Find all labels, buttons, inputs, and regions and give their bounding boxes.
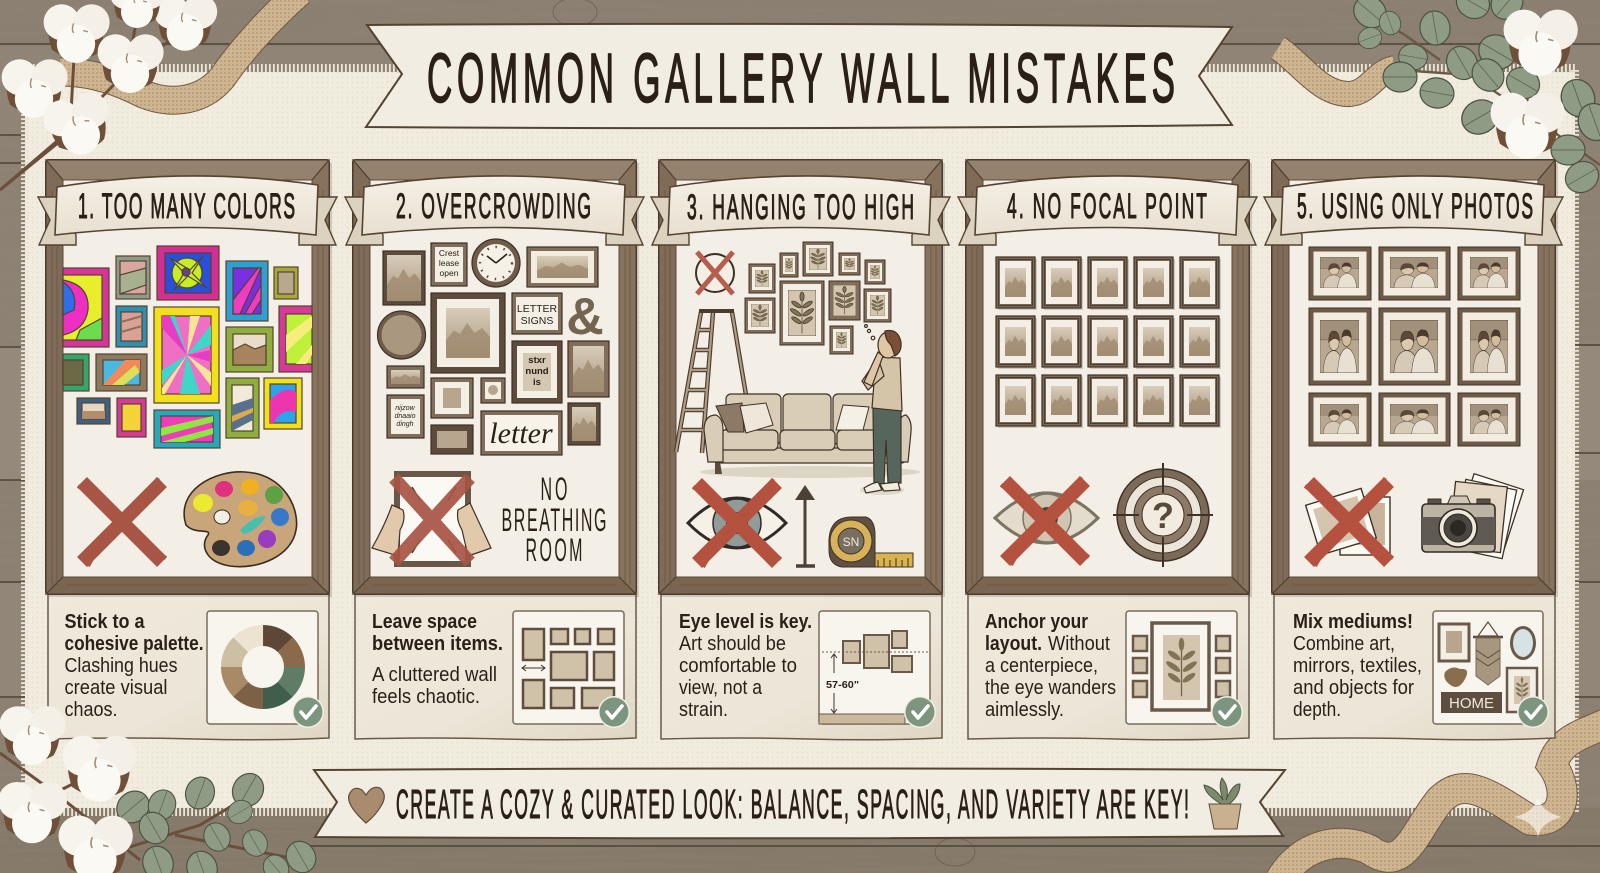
panel 2 crowded sepia frames bbox=[378, 239, 609, 455]
panel 3 high frames cluster bbox=[745, 242, 891, 354]
botanicals: top right eucalyptus and cotton bbox=[1347, 0, 1600, 198]
panel 5 crossed loose photos bbox=[1305, 478, 1393, 566]
panel 4 caption card: the eye wanders bbox=[985, 677, 1116, 699]
panel 5: using only photos bbox=[1264, 160, 1563, 740]
panel 5 mixed media thumbnail bbox=[1433, 611, 1549, 728]
panel 3 eye-level thumbnail bbox=[819, 611, 936, 728]
panel 1 caption card: chaos. bbox=[64, 699, 118, 721]
botanicals: top left cotton bbox=[0, 0, 217, 190]
panel 3 caption card: strain. bbox=[679, 699, 728, 721]
panel 4 wooden frame bbox=[966, 160, 1252, 597]
panel 2 heading ribbon: 2. OVERCROWDING bbox=[396, 186, 591, 226]
panel 4 heading ribbon bbox=[958, 176, 1257, 245]
panel 1 caption card: Stick to a bbox=[64, 611, 145, 633]
panel 1 color wheel thumbnail bbox=[207, 611, 324, 728]
panel 4 uniform frame grid bbox=[996, 257, 1221, 428]
panel 2 crowded sepia frames: SIGNS bbox=[521, 315, 553, 327]
title banner bbox=[366, 24, 1232, 128]
panel 5 caption card: mirrors, textiles, bbox=[1293, 655, 1422, 677]
panel 2 crowded sepia frames: is bbox=[533, 377, 541, 388]
panel 5 wooden frame bbox=[1272, 160, 1558, 597]
panel 4 caption card: layout. bbox=[985, 633, 1042, 655]
panel 2 no breathing room text bbox=[502, 472, 606, 569]
ribbon: bottom right bbox=[1280, 722, 1600, 873]
panel 2 caption card: feels chaotic. bbox=[372, 686, 480, 708]
panel 4 caption card: aimlessly. bbox=[985, 699, 1064, 721]
panel 4 caption card: Anchor your bbox=[985, 611, 1088, 633]
botanicals: bottom left cotton and eucalyptus bbox=[0, 706, 321, 873]
panel 4 target with question mark bbox=[1113, 463, 1213, 567]
panel 4: no focal point bbox=[958, 160, 1257, 740]
panel 3 crossed eye bbox=[688, 479, 786, 567]
panel 3 man looking up bbox=[860, 325, 904, 495]
panel 2 crowded sepia frames: letter bbox=[489, 417, 553, 450]
panel 2 crowded sepia frames: stxr bbox=[528, 355, 546, 366]
panel 1 heading ribbon bbox=[38, 176, 337, 245]
panel 1 red X bbox=[78, 478, 166, 566]
panel 2 crowded sepia frames: nund bbox=[525, 366, 549, 377]
panel 3 wooden frame bbox=[659, 160, 945, 597]
panel 5 heading ribbon bbox=[1264, 176, 1563, 245]
sparkle mark bbox=[1514, 797, 1562, 837]
panel 2 spaced layout thumbnail bbox=[513, 611, 630, 728]
panel 2 crowded sepia frames: nijzow bbox=[395, 405, 416, 412]
panel 2 crowded sepia frames: open bbox=[440, 268, 459, 278]
panel 2 caption card: A cluttered wall bbox=[372, 664, 497, 686]
panel 3 heading ribbon: 3. HANGING TOO HIGH bbox=[687, 187, 914, 227]
panel 2 crowded sepia frames: dnaaio bbox=[394, 413, 416, 420]
footer banner bbox=[314, 768, 1285, 838]
panel 4 anchored layout thumbnail bbox=[1126, 611, 1243, 728]
panel 1 heading ribbon: 1. TOO MANY COLORS bbox=[78, 186, 295, 226]
panel 2 wooden frame bbox=[353, 160, 639, 597]
panel 4 heading ribbon: 4. NO FOCAL POINT bbox=[1007, 186, 1207, 226]
panel 3 caption card: comfortable to bbox=[679, 655, 797, 677]
panel 4 target with question mark: ? bbox=[1152, 495, 1174, 536]
panel 2 caption card bbox=[355, 594, 636, 740]
panel 3 caption card bbox=[661, 594, 942, 740]
panel 2 crowded sepia frames: Crest bbox=[439, 248, 460, 258]
panel 1 colorful frames bbox=[63, 246, 312, 448]
panel 1 wooden frame bbox=[46, 160, 332, 597]
panel 2 crowded sepia frames: dingh bbox=[396, 421, 414, 428]
panel 4 caption card: a centerpiece, bbox=[985, 655, 1098, 677]
panel 2 no breathing room text: ROOM bbox=[526, 533, 582, 569]
panel 2 no breathing room text: BREATHING bbox=[502, 503, 606, 539]
panel 3 heading ribbon bbox=[651, 176, 950, 245]
icon: heart bbox=[349, 787, 384, 823]
panel 2 no breathing room text: NO bbox=[540, 472, 568, 508]
panel 3 caption card: Art should be bbox=[679, 633, 786, 655]
panel 1 caption card: cohesive palette. bbox=[64, 633, 204, 655]
panel 3 tape measure bbox=[829, 517, 913, 567]
panel 4 caption card bbox=[968, 594, 1249, 740]
panel 2 crowded sepia frames: lease bbox=[439, 258, 459, 268]
footer message: CREATE A COZY & CURATED LOOK: BALANCE, SPACING, AND VARIETY ARE KEY! bbox=[396, 780, 1189, 827]
panel 2: overcrowding bbox=[345, 160, 644, 740]
panel 1 caption card: Clashing hues bbox=[64, 655, 178, 677]
panel 3 up arrow bbox=[795, 485, 815, 567]
title banner: COMMON GALLERY WALL MISTAKES bbox=[427, 39, 1175, 117]
panel 5 caption card: Combine art, bbox=[1293, 633, 1395, 655]
panel 5 caption card: depth. bbox=[1293, 699, 1341, 721]
panel 4 crossed eye bbox=[995, 477, 1098, 565]
panel 2 crossed frame with hands bbox=[372, 474, 491, 564]
ribbon: top left bbox=[60, 0, 300, 100]
panel 5 mixed media thumbnail: HOME bbox=[1449, 695, 1494, 712]
panel 5 caption card: and objects for bbox=[1293, 677, 1414, 699]
panel 3 eye-level thumbnail: 57-60" bbox=[826, 679, 859, 691]
panel 5 caption card bbox=[1274, 594, 1555, 740]
panel 5 caption card: Mix mediums! bbox=[1293, 611, 1413, 633]
panel 3 caption card: Eye level is key. bbox=[679, 611, 812, 633]
panel 5 camera and photo stack bbox=[1422, 474, 1524, 559]
panel 4 caption card: Without bbox=[1048, 633, 1110, 655]
panel 2 caption card: between items. bbox=[372, 633, 503, 655]
ribbon: top right bbox=[1278, 48, 1395, 94]
panel 3 sofa bbox=[700, 394, 920, 478]
panel 5 photo frames bbox=[1309, 247, 1520, 446]
panel 2 crowded sepia frames: LETTER bbox=[517, 303, 558, 315]
panel 3 tape measure: SN bbox=[843, 535, 859, 549]
panel 1 paint palette icon bbox=[184, 472, 297, 567]
panel 2 crowded sepia frames: & bbox=[566, 288, 604, 346]
panel 5 heading ribbon: 5. USING ONLY PHOTOS bbox=[1297, 186, 1533, 226]
icon: potted plant bbox=[1204, 778, 1241, 829]
panel 3 caption card: view, not a bbox=[679, 677, 763, 699]
panel 2 caption card: Leave space bbox=[372, 611, 477, 633]
panel 3 ladder bbox=[676, 311, 746, 453]
panel 2 heading ribbon bbox=[345, 176, 644, 245]
panel 3 crossed circle icon bbox=[696, 252, 734, 294]
panel 1 caption card: create visual bbox=[64, 677, 168, 699]
panel 1: too many colors bbox=[38, 160, 337, 740]
panel 1 caption card bbox=[48, 594, 329, 740]
panel 3: hanging too high bbox=[651, 160, 950, 740]
